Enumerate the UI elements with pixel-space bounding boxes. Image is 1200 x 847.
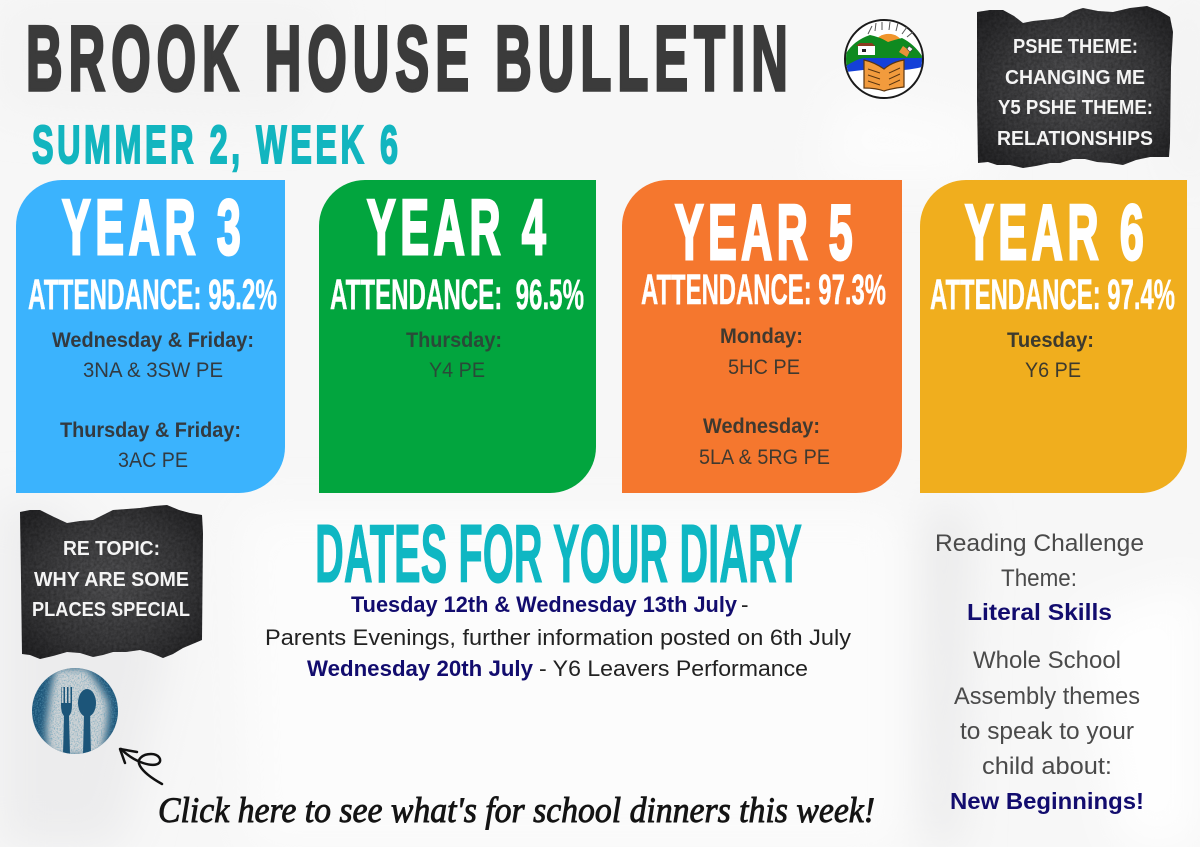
Year 3 PE details: 3AC PE (118, 449, 188, 472)
assembly themes text: New Beginnings! (950, 788, 1144, 814)
panel: Year 6 (920, 180, 1187, 493)
Year 6 PE details: Y6 PE (1025, 359, 1081, 382)
diary dates text: Wednesday 20th July (307, 656, 533, 681)
assembly themes text: to speak to your (960, 718, 1134, 745)
assembly themes text: child about: (982, 753, 1112, 780)
RE topic text: PLACES SPECIAL (32, 599, 190, 621)
diary dates text: - (741, 592, 748, 617)
handwritten dinner link: Click here to see what's for school dinners this week! (158, 790, 875, 830)
panel: Year 5 (622, 180, 902, 493)
Year 4 attendance: ATTENDANCE: 96.5% (330, 271, 584, 319)
Year 5 heading: YEAR 5 (675, 190, 853, 276)
Year 3 PE details: 3NA & 3SW PE (83, 359, 223, 382)
diary dates text (265, 592, 852, 681)
subtitle: term and week: SUMMER 2, WEEK 6 (32, 116, 398, 175)
PSHE theme text (997, 36, 1153, 150)
RE topic text: WHY ARE SOME (34, 569, 189, 591)
reading challenge text (935, 530, 1144, 625)
icon: fork and spoon (32, 668, 118, 756)
panel: Year 4 (319, 180, 596, 493)
Year 3 PE details: Thursday & Friday: (60, 419, 241, 442)
RE topic text (32, 538, 190, 621)
Year 5 attendance: ATTENDANCE: 97.3% (641, 266, 886, 314)
panel: Year 3 (16, 180, 285, 493)
Year 3 heading: YEAR 3 (62, 185, 241, 271)
title: BROOK HOUSE BULLETIN (26, 7, 788, 110)
panel: PSHE theme (977, 6, 1173, 168)
Year 6 PE details: Tuesday: (1007, 329, 1094, 352)
panel: RE topic (20, 505, 203, 659)
arrow to dinner menu (120, 749, 162, 784)
Year 5 PE details: 5LA & 5RG PE (699, 446, 830, 469)
icon: school logo (844, 20, 923, 98)
Year 5 PE details: 5HC PE (728, 356, 800, 379)
assembly themes text (950, 647, 1144, 814)
PSHE theme text: CHANGING ME (1005, 67, 1145, 89)
Year 4 heading: YEAR 4 (367, 185, 546, 271)
reading challenge text: Literal Skills (967, 599, 1112, 625)
reading challenge text: Reading Challenge (935, 530, 1144, 557)
diary dates text: Tuesday 12th & Wednesday 13th July (351, 592, 737, 617)
Year 6 heading: YEAR 6 (965, 190, 1144, 276)
assembly themes text: Whole School (973, 647, 1121, 674)
Year 3 PE details (52, 329, 254, 472)
diary dates text: - Y6 Leavers Performance (539, 656, 808, 681)
Year 4 PE details: Thursday: (406, 329, 502, 352)
Year 5 PE details: Monday: (720, 325, 803, 348)
Year 5 PE details (699, 325, 830, 469)
Year 4 PE details (406, 329, 502, 382)
Year 3 PE details: Wednesday & Friday: (52, 329, 254, 352)
PSHE theme text: Y5 PSHE THEME: (998, 97, 1153, 119)
Year 3 attendance: ATTENDANCE: 95.2% (28, 271, 277, 319)
Year 6 PE details (1007, 329, 1094, 382)
assembly themes text: Assembly themes (954, 683, 1140, 710)
diary dates text: Parents Evenings, further information posted on 6th July (265, 625, 852, 650)
reading challenge text: Theme: (1001, 565, 1077, 592)
Year 4 PE details: Y4 PE (429, 359, 485, 382)
PSHE theme text: RELATIONSHIPS (997, 128, 1153, 150)
Year 5 PE details: Wednesday: (703, 415, 820, 438)
RE topic text: RE TOPIC: (63, 538, 160, 560)
PSHE theme text: PSHE THEME: (1013, 36, 1138, 58)
